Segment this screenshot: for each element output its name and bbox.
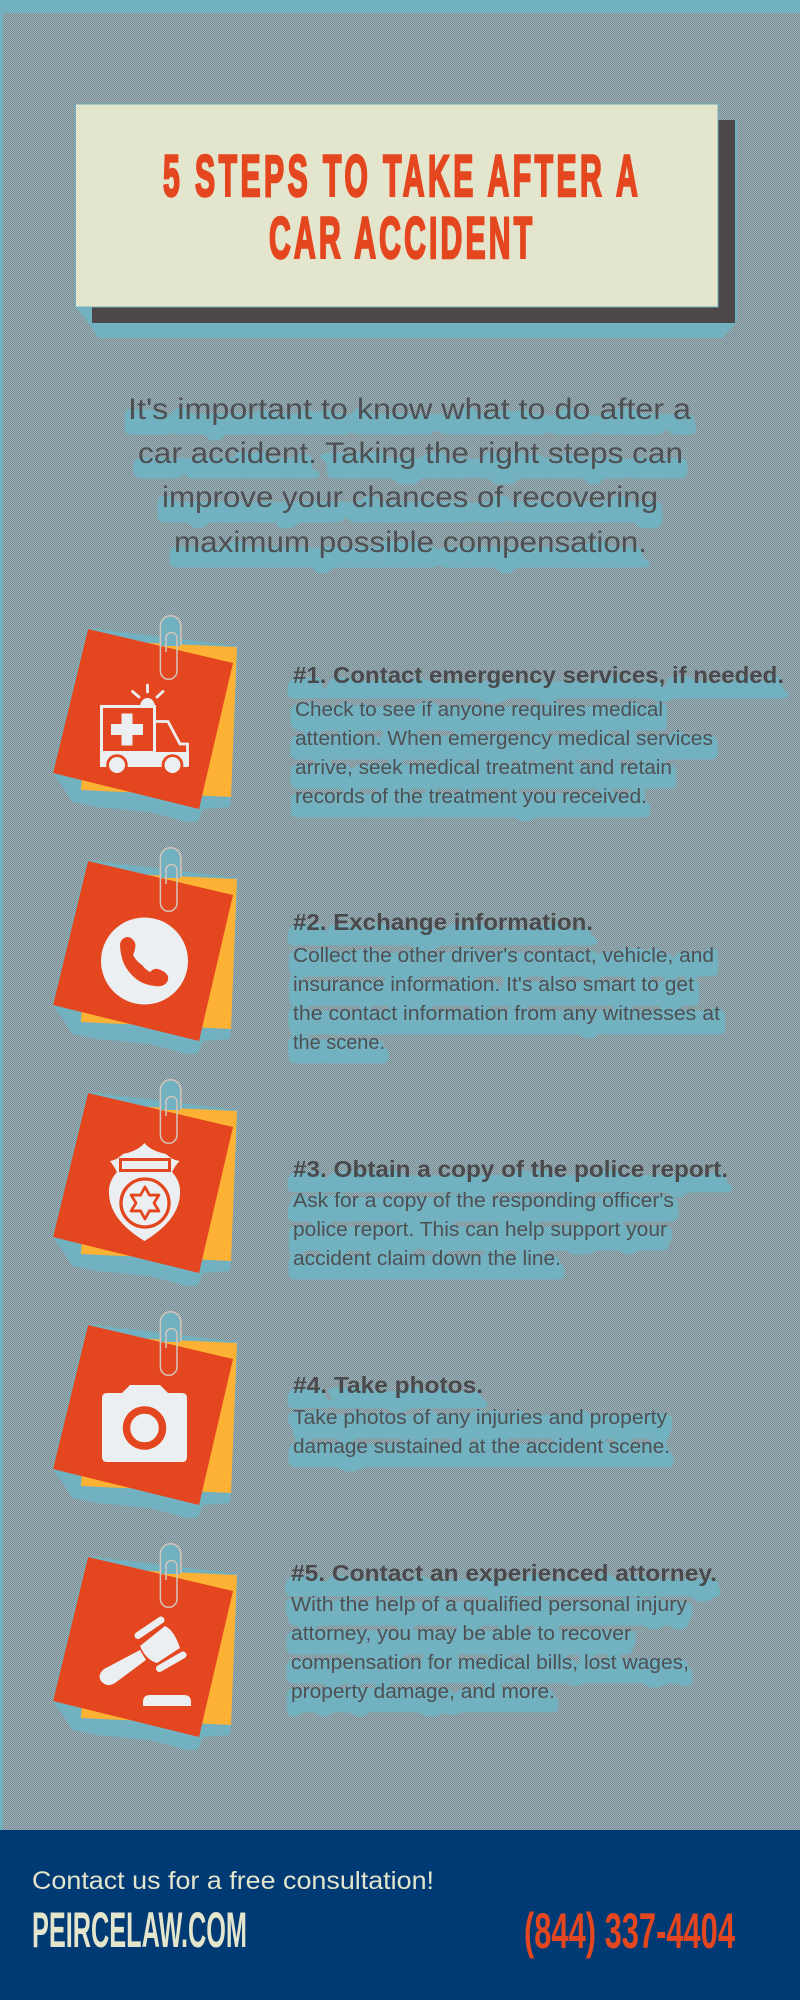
body bbox=[293, 1406, 670, 1458]
body bbox=[291, 1593, 689, 1703]
card dark shadow bbox=[92, 120, 735, 323]
body bbox=[295, 698, 713, 808]
title bbox=[163, 143, 638, 271]
website: PEIRCELAW.COM bbox=[32, 1902, 247, 1958]
step 3 text bbox=[293, 1156, 728, 1270]
body: the scene. bbox=[293, 1031, 385, 1054]
heading: #2. Exchange information. bbox=[293, 909, 593, 935]
paperclip bbox=[160, 1544, 181, 1607]
footer band bbox=[0, 1830, 800, 2000]
body: records of the treatment you received. bbox=[295, 785, 647, 808]
intro paragraph bbox=[128, 393, 691, 559]
body: attention. When emergency medical services bbox=[295, 727, 713, 750]
body: police report. This can help support your bbox=[293, 1218, 667, 1241]
note shadow bbox=[52, 628, 238, 822]
body: insurance information. It's also smart to get bbox=[293, 973, 694, 996]
card teal shadow bbox=[76, 120, 737, 338]
body: Check to see if anyone requires medical bbox=[295, 698, 663, 721]
step 4 text bbox=[293, 1372, 670, 1458]
step 5 text bbox=[291, 1560, 717, 1703]
note 1: ambulance bbox=[52, 616, 238, 822]
intro paragraph: maximum possible compensation. bbox=[174, 526, 647, 559]
card panel bbox=[76, 104, 718, 307]
paperclip bbox=[160, 616, 181, 679]
red note bbox=[53, 1557, 233, 1737]
body: With the help of a qualified personal injury bbox=[291, 1593, 688, 1616]
paperclip bbox=[160, 1080, 181, 1143]
body: damage sustained at the accident scene. bbox=[293, 1435, 670, 1458]
yellow note bbox=[81, 1104, 237, 1261]
paperclip bbox=[160, 1312, 181, 1375]
yellow note bbox=[81, 1568, 237, 1725]
intro paragraph: improve your chances of recovering bbox=[162, 481, 658, 514]
icon: police badge bbox=[109, 1143, 180, 1241]
contact line: Contact us for a free consultation! bbox=[32, 1867, 434, 1895]
step 2 text bbox=[293, 909, 720, 1054]
body: Take photos of any injuries and property bbox=[293, 1406, 668, 1429]
note 3: badge bbox=[52, 1080, 238, 1286]
note 2: phone bbox=[52, 848, 238, 1054]
yellow note bbox=[81, 1336, 237, 1493]
heading: #5. Contact an experienced attorney. bbox=[291, 1560, 717, 1586]
title: CAR ACCIDENT bbox=[269, 205, 532, 271]
intro paragraph: car accident. Taking the right steps can bbox=[138, 437, 683, 470]
heading: #4. Take photos. bbox=[293, 1372, 483, 1398]
heading: #3. Obtain a copy of the police report. bbox=[293, 1156, 728, 1182]
title card bbox=[76, 104, 737, 338]
body: Collect the other driver's contact, vehicle, and bbox=[293, 944, 714, 967]
note 4: camera bbox=[52, 1312, 238, 1518]
icon: gavel bbox=[100, 1620, 191, 1706]
body: arrive, seek medical treatment and retain bbox=[295, 756, 672, 779]
note shadow bbox=[52, 1092, 238, 1286]
icon: phone bbox=[101, 918, 188, 1004]
red note bbox=[53, 1093, 233, 1273]
body bbox=[293, 1189, 674, 1270]
icon: ambulance bbox=[100, 685, 190, 776]
footer bbox=[0, 1830, 800, 2000]
note shadow bbox=[52, 1324, 238, 1518]
red note bbox=[53, 861, 233, 1041]
note 5: gavel bbox=[52, 1544, 238, 1750]
red note bbox=[53, 1325, 233, 1505]
step 1 text bbox=[293, 662, 784, 808]
yellow note bbox=[81, 872, 237, 1029]
body: property damage, and more. bbox=[291, 1680, 555, 1703]
body: the contact information from any witnesses at bbox=[293, 1002, 720, 1025]
note shadow bbox=[52, 1556, 238, 1750]
body: accident claim down the line. bbox=[293, 1247, 561, 1270]
body bbox=[293, 944, 720, 1054]
icon: camera bbox=[102, 1385, 187, 1462]
note shadow bbox=[52, 860, 238, 1054]
body: Ask for a copy of the responding officer's bbox=[293, 1189, 674, 1212]
title: 5 STEPS TO TAKE AFTER A bbox=[163, 143, 638, 209]
paperclip bbox=[160, 848, 181, 911]
yellow note bbox=[81, 640, 237, 797]
intro paragraph: It's important to know what to do after a bbox=[128, 393, 691, 426]
red note bbox=[53, 629, 233, 809]
body: attorney, you may be able to recover bbox=[291, 1622, 631, 1645]
body: compensation for medical bills, lost wages, bbox=[291, 1651, 689, 1674]
heading: #1. Contact emergency services, if needed. bbox=[293, 662, 784, 688]
